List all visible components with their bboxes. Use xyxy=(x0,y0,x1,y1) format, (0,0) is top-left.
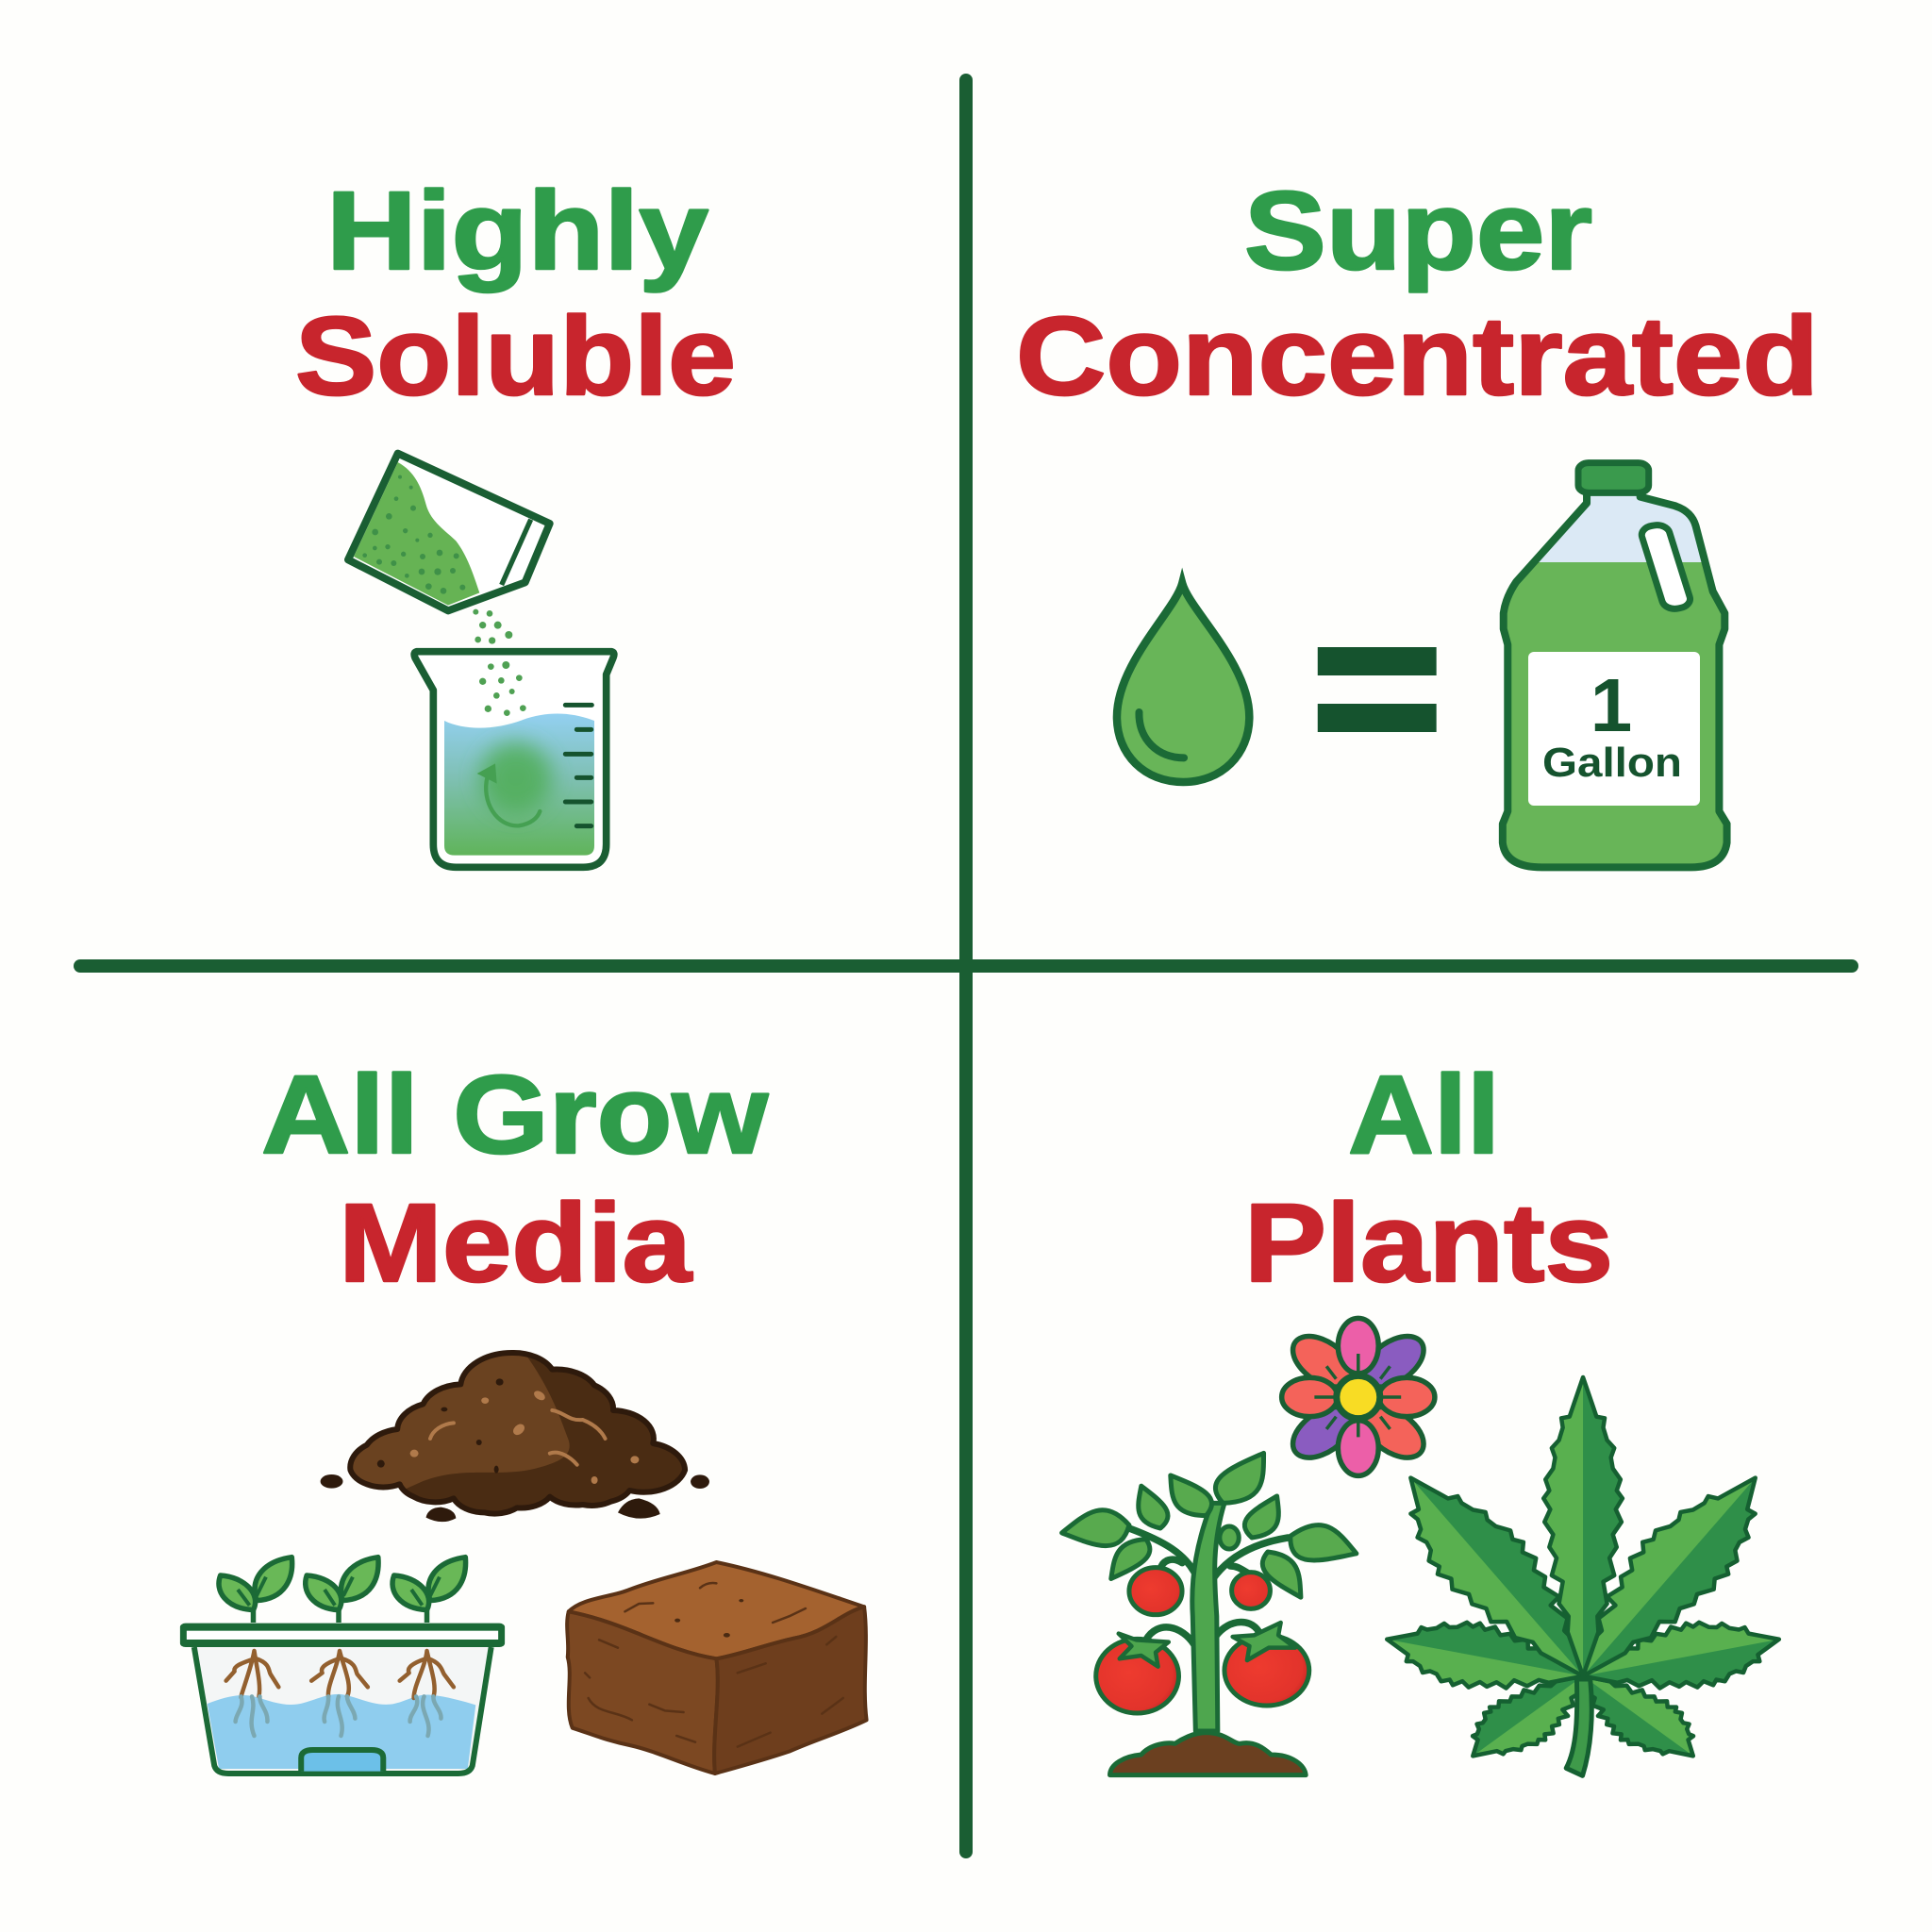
icon: drop xyxy=(1117,583,1249,782)
icon: cannabis leaf xyxy=(1368,1377,1798,1775)
panel: all grow media xyxy=(180,1053,867,1774)
icon: powder bag pouring into beaker xyxy=(348,454,614,867)
icon: coco coir brick xyxy=(567,1562,867,1774)
icon: soil pile xyxy=(321,1349,709,1525)
heading: All Grow Media: All Grow xyxy=(261,1053,769,1177)
heading: All Grow Media: Media xyxy=(339,1181,693,1306)
soil mound xyxy=(1110,1733,1306,1775)
heading: Super Concentrated xyxy=(1016,169,1819,419)
seedlings xyxy=(219,1557,466,1623)
heading: All Grow Media xyxy=(261,1053,769,1306)
icon: flower xyxy=(1280,1318,1436,1475)
leaves xyxy=(1058,1507,1134,1551)
icons: plants xyxy=(1058,1318,1798,1775)
heading: All Plants: All xyxy=(1348,1053,1500,1177)
label: 1 Gallon: 1 xyxy=(1591,663,1632,747)
icon: tomato plant xyxy=(1058,1446,1367,1775)
label: 1 Gallon xyxy=(1528,652,1700,806)
icon: powder bag xyxy=(348,454,550,610)
tomatoes xyxy=(1096,1568,1309,1713)
panel: highly soluble xyxy=(295,169,736,867)
heading: Super Concentrated: Super xyxy=(1244,169,1592,293)
divider: horizontal xyxy=(74,959,1858,973)
heading: All Plants xyxy=(1244,1053,1613,1306)
divider: vertical xyxy=(959,74,973,1858)
heading: Highly Soluble: Highly xyxy=(326,169,708,293)
heading: All Plants: Plants xyxy=(1244,1181,1613,1306)
panel: all plants xyxy=(1058,1053,1798,1775)
icon: drop equals one gallon xyxy=(1117,463,1727,867)
heading: Highly Soluble xyxy=(295,169,736,419)
label: 1 Gallon: Gallon xyxy=(1542,740,1682,786)
falling powder xyxy=(473,609,526,716)
roots xyxy=(226,1651,454,1698)
icons: grow media xyxy=(180,1349,867,1774)
icon: gallon jug xyxy=(1503,463,1727,867)
icon: equals sign xyxy=(1318,647,1437,732)
stems xyxy=(1129,1503,1288,1731)
icon: hydroponic tub xyxy=(180,1557,505,1774)
icon: beaker xyxy=(414,652,614,867)
heading: Highly Soluble: Soluble xyxy=(295,294,736,419)
heading: Super Concentrated: Concentrated xyxy=(1016,294,1819,419)
panel: super concentrated xyxy=(1016,169,1819,867)
